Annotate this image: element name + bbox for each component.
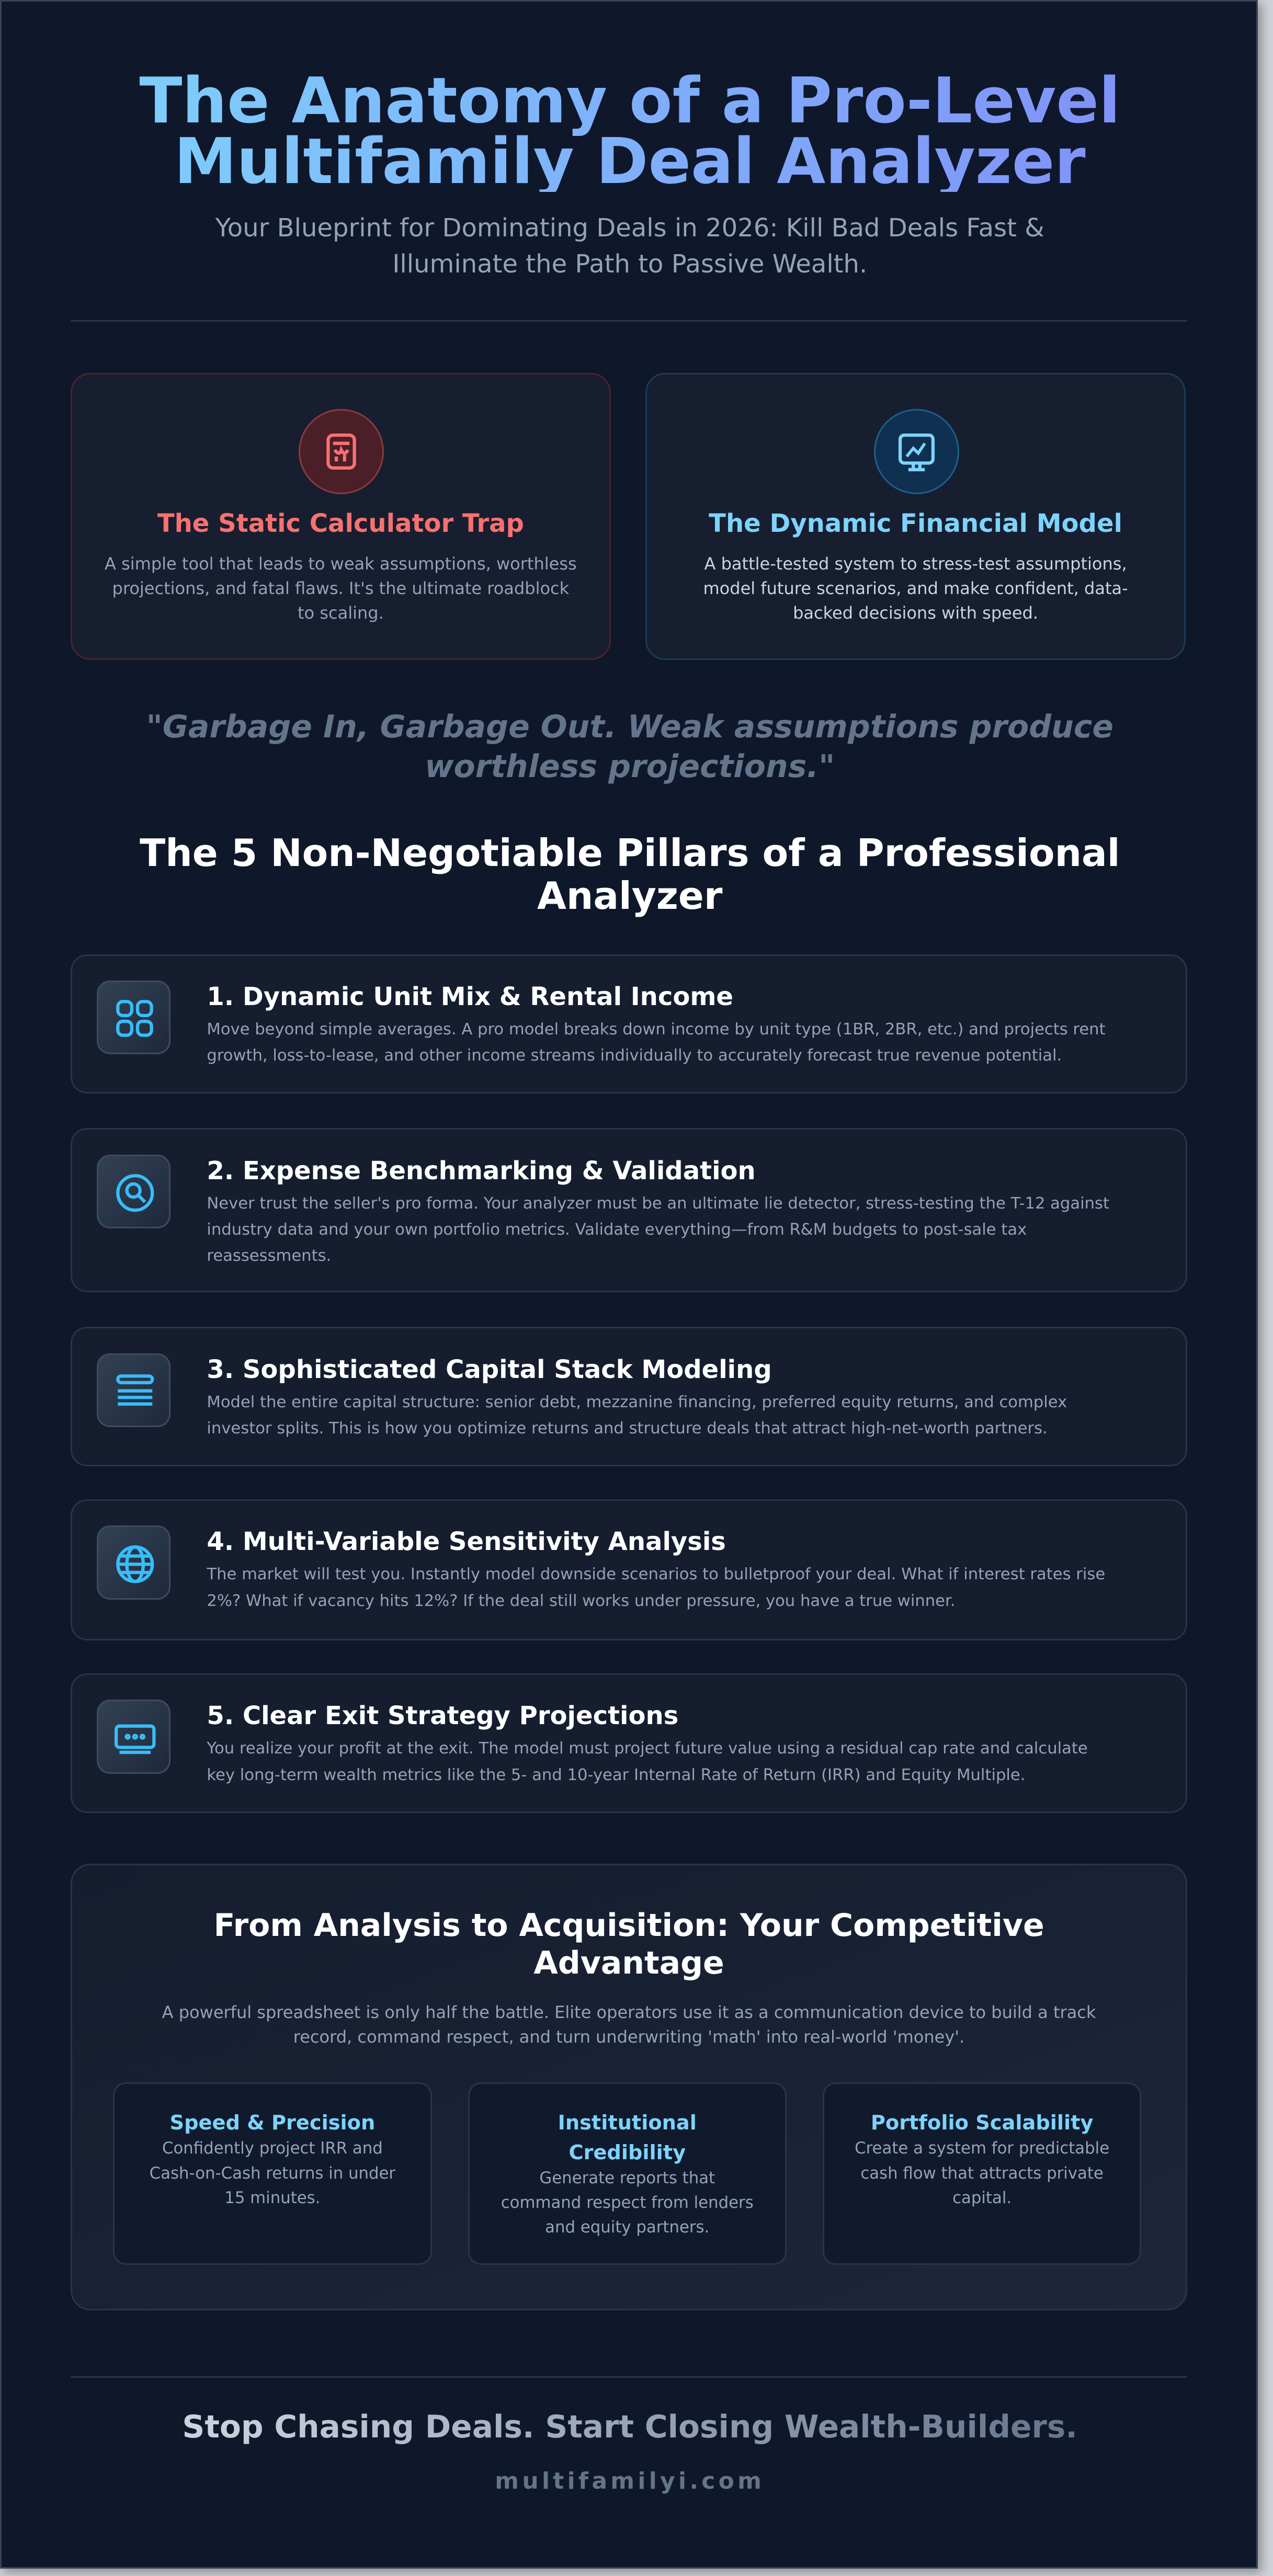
pillar text: Move beyond simple averages. A pro model breaks down income by unit type (1BR, 2BR, etc.) and projects rent <box>207 1020 1106 1039</box>
panel: pillar 1 <box>71 954 1187 1093</box>
text: A simple tool that leads to weak assumptions, worthless <box>105 554 577 574</box>
card title: Institutional <box>558 2111 697 2135</box>
icon: globe <box>97 1525 171 1600</box>
card title <box>558 2111 697 2164</box>
icon: stack <box>97 1353 171 1427</box>
title: Multifamily Deal Analyzer <box>174 125 1086 198</box>
panel: pillar 4 <box>71 1499 1187 1640</box>
text: A powerful spreadsheet is only half the battle. Elite operators use it as a communication device to build a track <box>162 2002 1096 2022</box>
pillar title: 2. Expense Benchmarking & Validation <box>207 1156 756 1186</box>
text: A battle-tested system to stress-test assumptions, <box>704 554 1127 574</box>
card: speed & precision <box>113 2082 432 2265</box>
panel: pillar 2 <box>71 1128 1187 1292</box>
pillar text <box>207 1565 1105 1610</box>
pillar title: 4. Multi-Variable Sensitivity Analysis <box>207 1527 726 1556</box>
card text: and equity partners. <box>545 2218 709 2237</box>
card text <box>855 2139 1109 2207</box>
text: to scaling. <box>298 603 384 623</box>
text: model future scenarios, and make confident, data- <box>703 578 1128 598</box>
card text: 15 minutes. <box>224 2189 320 2207</box>
heading: The Dynamic Financial Model <box>709 509 1122 538</box>
card title: Credibility <box>569 2141 686 2164</box>
title: The Anatomy of a Pro-Level <box>139 64 1120 138</box>
footer tagline: Stop Chasing Deals. Start Closing Wealth-Builders. <box>182 2409 1077 2445</box>
icon: search <box>97 1155 171 1228</box>
heading: From Analysis to Acquisition: Your Competitive <box>213 1907 1044 1944</box>
icon: cash <box>97 1700 171 1774</box>
panel: static calculator trap <box>71 373 611 660</box>
pillar text: The market will test you. Instantly model downside scenarios to bulletproof your deal. What if interest rates rise <box>207 1565 1105 1583</box>
subtitle: Your Blueprint for Dominating Deals in 2026: Kill Bad Deals Fast & Illuminate the Path to Passive Wealth. <box>215 213 1044 279</box>
pillar title: 1. Dynamic Unit Mix & Rental Income <box>207 982 733 1011</box>
card text: Create a system for predictable <box>855 2139 1109 2158</box>
pillar text: Never trust the seller's pro forma. Your analyzer must be an ultimate lie detector, stress-testing the T-12 against <box>207 1194 1109 1213</box>
card text: Confidently project IRR and <box>162 2139 383 2158</box>
panel: pillar 3 <box>71 1327 1187 1466</box>
card text: cash flow that attracts private <box>860 2164 1104 2183</box>
pillar text: Model the entire capital structure: senior debt, mezzanine financing, preferred equity returns, and complex <box>207 1393 1067 1411</box>
text <box>703 554 1128 623</box>
card text: Generate reports that <box>539 2169 715 2187</box>
pillar text: industry data and your own portfolio metrics. Validate everything—from R&M budgets to post-sale tax <box>207 1221 1027 1239</box>
text: projections, and fatal flaws. It's the ultimate roadblock <box>112 578 569 598</box>
icon: broken calculator <box>299 409 384 494</box>
card title: Portfolio Scalability <box>871 2111 1093 2135</box>
card: institutional credibility <box>468 2082 787 2265</box>
card text: capital. <box>952 2189 1011 2207</box>
panel: competitive advantage <box>71 1864 1187 2310</box>
pillar text: 2%? What if vacancy hits 12%? If the deal still works under pressure, you have a true winner. <box>207 1592 955 1610</box>
footer url: multifamilyi.com <box>495 2468 765 2494</box>
pillar text: key long-term wealth metrics like the 5- and 10-year Internal Rate of Return (IRR) and Equity Multiple. <box>207 1766 1025 1784</box>
panel: dynamic financial model <box>645 373 1186 660</box>
heading: Advantage <box>533 1945 724 1981</box>
pillar text: investor splits. This is how you optimize returns and structure deals that attract high-net-worth partners. <box>207 1419 1048 1438</box>
pillar text <box>207 1393 1067 1438</box>
card text: Cash-on-Cash returns in under <box>150 2164 395 2183</box>
card text: command respect from lenders <box>501 2193 754 2212</box>
card text <box>150 2139 395 2207</box>
icon: grid <box>97 981 171 1054</box>
text <box>162 2002 1096 2047</box>
text <box>105 554 577 623</box>
icon: monitor chart <box>873 409 959 494</box>
pillar text <box>207 1194 1109 1265</box>
card text <box>501 2169 754 2237</box>
heading <box>213 1907 1044 1981</box>
pillar text <box>207 1020 1106 1065</box>
text: backed decisions with speed. <box>793 603 1038 623</box>
pillar text: reassessments. <box>207 1247 331 1265</box>
card title: Speed & Precision <box>170 2111 375 2135</box>
pillar title: 3. Sophisticated Capital Stack Modeling <box>207 1355 772 1384</box>
quote: "Garbage In, Garbage Out. Weak assumptions produce worthless projections." <box>146 709 1113 785</box>
card: portfolio scalability <box>823 2082 1141 2265</box>
heading: pillars: The 5 Non-Negotiable Pillars of a Professional Analyzer <box>140 831 1120 918</box>
panel: pillar 5 <box>71 1673 1187 1813</box>
pillar text: You realize your profit at the exit. The model must project future value using a residual cap rate and calculate <box>207 1739 1088 1758</box>
title <box>35 71 1225 192</box>
pillar text <box>207 1739 1088 1784</box>
heading: The Static Calculator Trap <box>157 509 524 538</box>
text: record, command respect, and turn underwriting 'math' into real-world 'money'. <box>293 2027 964 2047</box>
pillar text: growth, loss-to-lease, and other income streams individually to accurately forecast true revenue potential. <box>207 1046 1062 1065</box>
pillar title: 5. Clear Exit Strategy Projections <box>207 1701 678 1730</box>
